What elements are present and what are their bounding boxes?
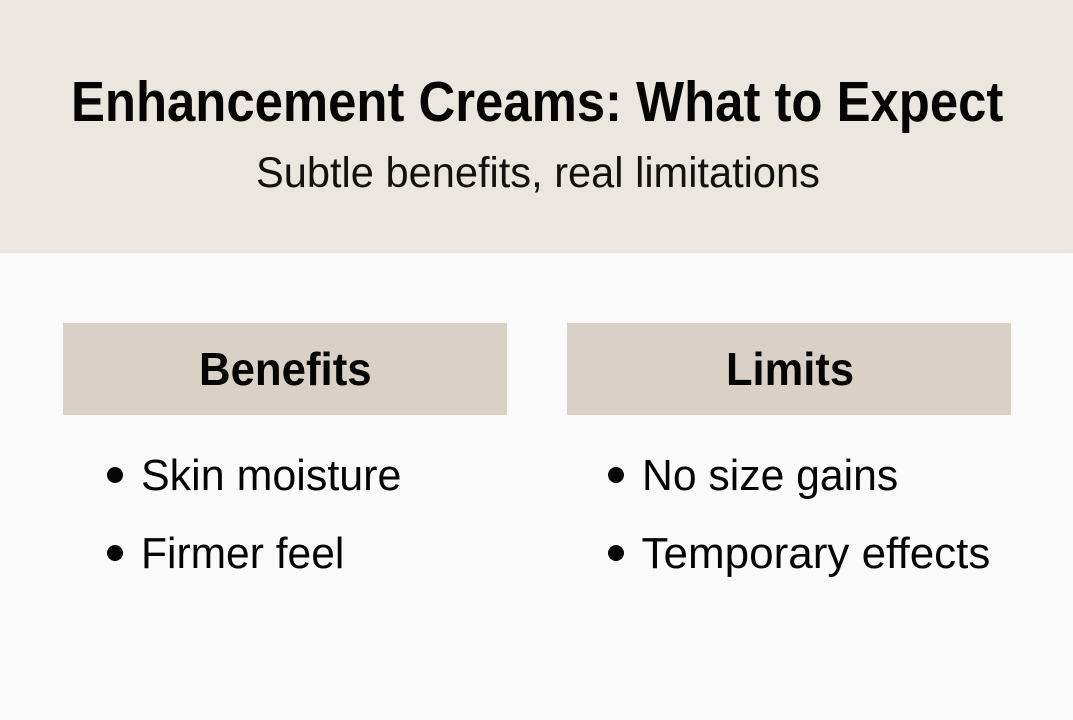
subtitle: Subtle benefits, real limitations (256, 149, 820, 197)
header band (0, 0, 1073, 253)
title: Enhancement Creams: What to Expect (70, 70, 1003, 134)
heading: benefits: Benefits (198, 343, 371, 395)
heading: benefits (63, 323, 507, 415)
heading: limits: Limits (726, 343, 854, 395)
bullet: no size gains: No size gains (642, 451, 898, 500)
heading: limits (567, 323, 1011, 415)
panel: limits (567, 323, 1011, 578)
bullet: temporary effects: Temporary effects (642, 529, 990, 578)
bullet: firmer feel: Firmer feel (141, 529, 345, 578)
bullet: skin moisture: Skin moisture (141, 451, 401, 500)
panel: benefits (63, 323, 507, 578)
